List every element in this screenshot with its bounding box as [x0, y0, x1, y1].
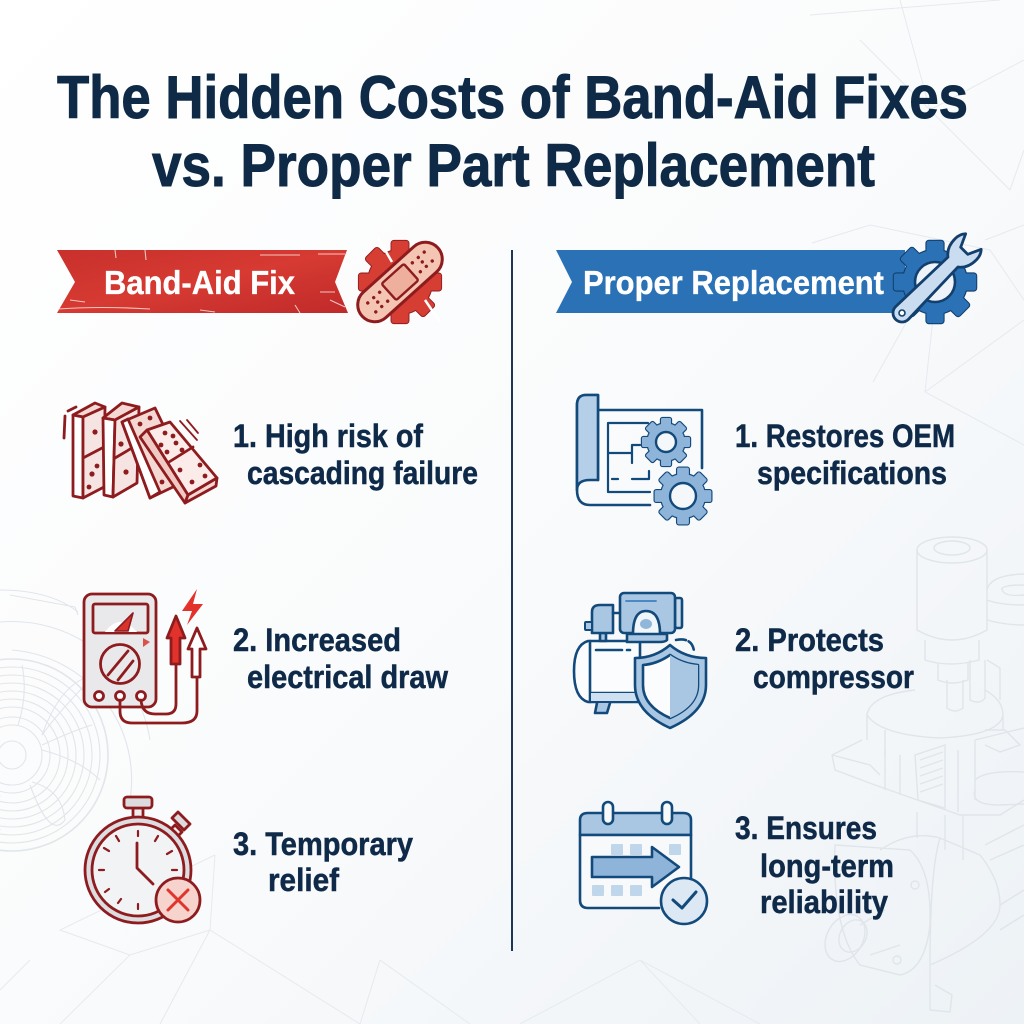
item text — [735, 622, 914, 695]
item: increased electrical draw — [84, 589, 448, 723]
item text: 3. Temporary — [233, 826, 413, 862]
item text: long-term — [760, 848, 894, 884]
item text: compressor — [753, 659, 914, 695]
item text: reliability — [760, 884, 888, 920]
panel: proper replacement header — [556, 231, 984, 330]
item: ensures long-term reliability — [580, 802, 894, 924]
icon: multimeter — [84, 589, 206, 723]
background: fan line drawing — [0, 590, 150, 851]
item text — [233, 826, 413, 898]
icon: gear and wrench — [885, 231, 984, 330]
banner label: Band-Aid Fix — [104, 264, 296, 301]
icon: broken gear with bandage — [351, 235, 449, 329]
icon: compressor with shield — [574, 593, 706, 728]
item text: relief — [268, 862, 339, 898]
title — [57, 64, 968, 199]
item text: electrical draw — [247, 659, 448, 695]
item text: 2. Increased — [233, 622, 401, 658]
icon: stopwatch with x — [85, 797, 200, 923]
item text — [233, 622, 448, 695]
item text — [735, 810, 894, 920]
item text: specifications — [757, 455, 947, 491]
item text — [233, 418, 478, 491]
panel: band-aid fix header — [57, 235, 449, 329]
title: vs. Proper Part Replacement — [152, 132, 875, 199]
icon: blueprint with gears — [577, 395, 711, 524]
item text — [735, 418, 955, 491]
center divider — [511, 250, 513, 951]
item: restores oem specifications — [577, 395, 955, 524]
item text: cascading failure — [247, 455, 478, 491]
item text: 2. Protects — [735, 622, 884, 658]
background: pump line drawing — [817, 537, 1024, 1012]
blue ribbon banner — [556, 250, 905, 313]
icon: calendar with arrow and check — [580, 802, 707, 924]
item text: 3. Ensures — [735, 810, 877, 846]
banner label: Proper Replacement — [583, 264, 884, 301]
icon: falling dominoes — [64, 403, 217, 503]
red ribbon banner — [57, 250, 348, 313]
item: protects compressor — [574, 593, 914, 728]
item text: 1. Restores OEM — [735, 418, 955, 454]
item: temporary relief — [85, 797, 413, 923]
item text: 1. High risk of — [233, 418, 423, 454]
item: high risk of cascading failure — [64, 403, 478, 503]
